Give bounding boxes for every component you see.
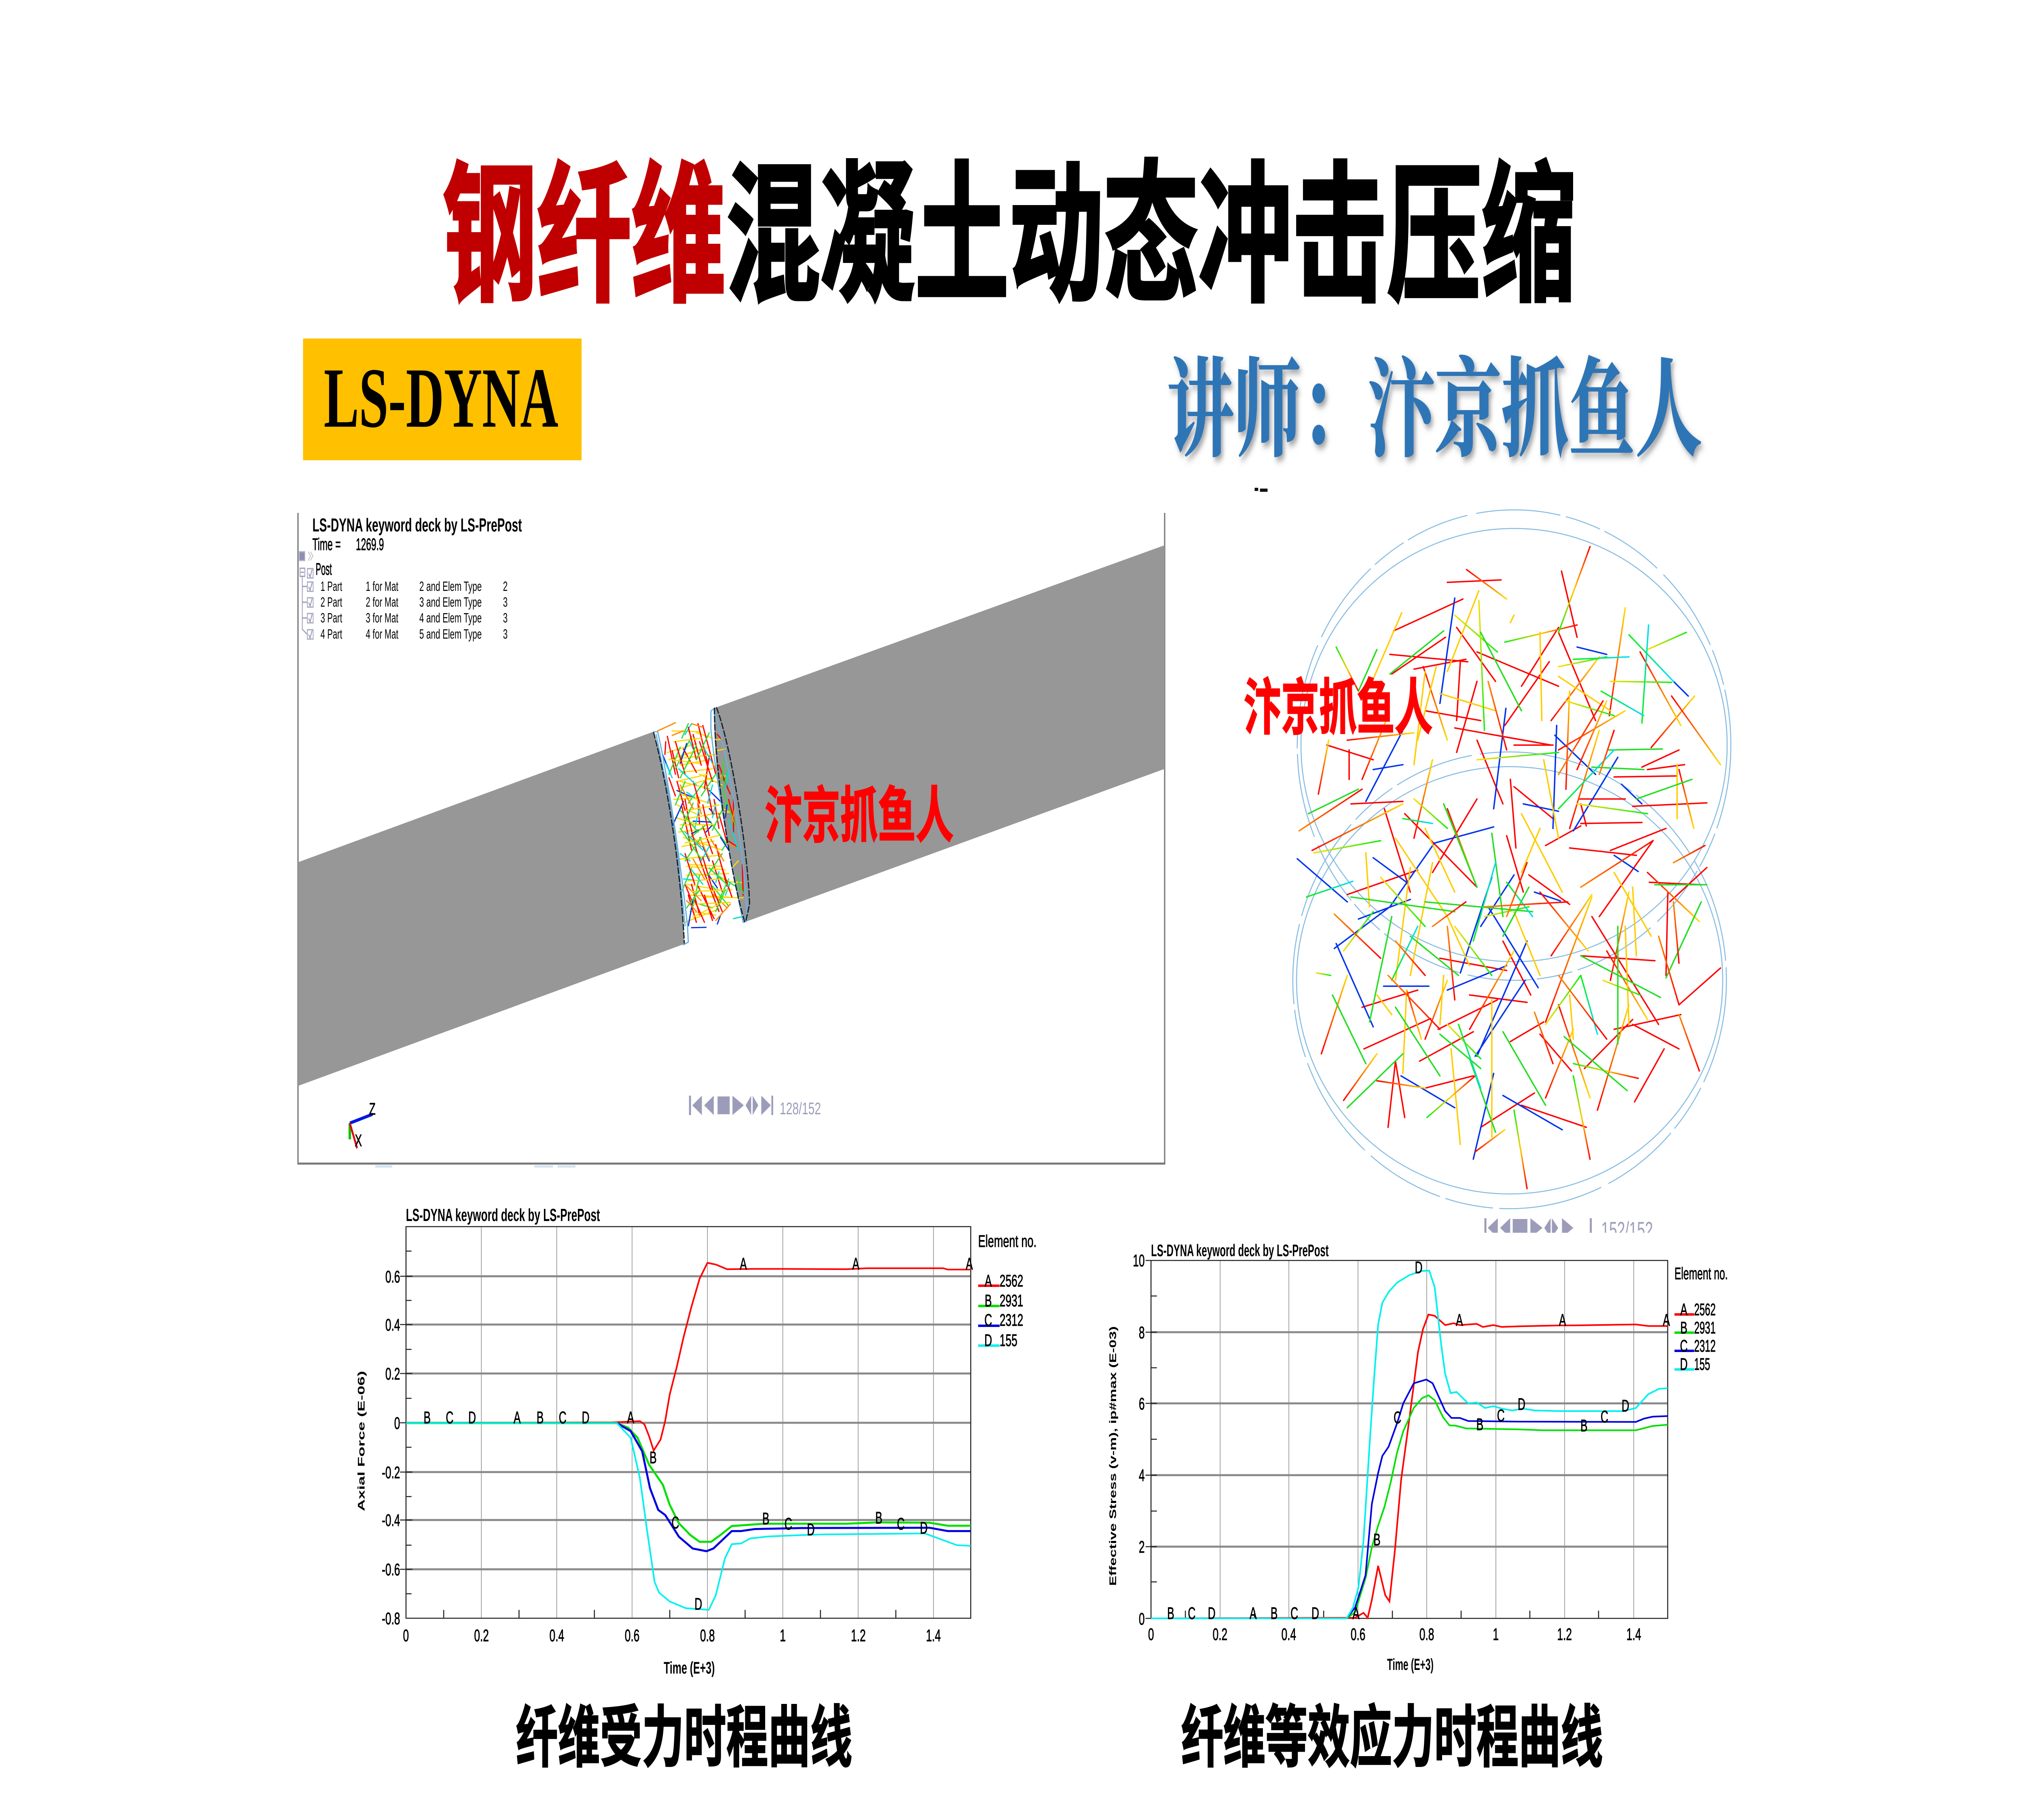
animation controls [689, 1096, 821, 1118]
plot header: 1269.9 [356, 535, 384, 554]
x tick labels: 0.2 [1213, 1625, 1227, 1644]
legend [978, 1232, 1036, 1350]
y axis title: Axial Force (E-06) [356, 1371, 366, 1511]
curve letters: C [1601, 1407, 1608, 1426]
x tick labels: 1.2 [851, 1626, 866, 1645]
y tick labels [1133, 1251, 1145, 1629]
curve letters: A [514, 1408, 521, 1427]
clipped animation controls [1484, 1218, 1652, 1233]
badge: LS-DYNA: LS-DYNA [324, 351, 558, 446]
chart title: LS-DYNA keyword deck by LS-PrePost [406, 1205, 600, 1225]
legend: D [984, 1331, 992, 1350]
caption: fiber force: 纤维受力时程曲线 [516, 1701, 852, 1776]
legend: 155 [1000, 1331, 1017, 1350]
curve letters: A [1663, 1311, 1670, 1330]
legend: 2312 [1000, 1311, 1023, 1330]
specimen rings [1293, 510, 1731, 1208]
curve letters: D [1311, 1604, 1319, 1623]
x tick labels: 0 [403, 1626, 409, 1645]
curve letters: A [1250, 1604, 1257, 1623]
x tick labels: 1.4 [926, 1626, 941, 1645]
part tree legend: 1 for Mat [366, 579, 398, 594]
caption: fiber equivalent stress: 纤维等效应力时程曲线 [1181, 1700, 1603, 1776]
x axis title: Time (E+3) [664, 1659, 715, 1678]
part tree legend: 3 for Mat [366, 610, 398, 625]
curve letters: D [468, 1408, 476, 1427]
curve letters: C [1497, 1406, 1505, 1425]
y tick labels [382, 1268, 400, 1628]
legend: 2312 [1694, 1337, 1716, 1356]
curve letters: D [807, 1520, 814, 1539]
curve letters: C [559, 1408, 567, 1427]
legend [1675, 1264, 1728, 1374]
y tick labels: 6 [1139, 1395, 1145, 1414]
legend: C [984, 1311, 992, 1330]
legend: A [1680, 1300, 1688, 1319]
y tick labels: -0.2 [382, 1463, 400, 1482]
y tick labels: 4 [1139, 1466, 1145, 1485]
curve letters: C [1394, 1408, 1401, 1427]
curve letters: D [1208, 1604, 1216, 1623]
y tick labels: 0.2 [385, 1365, 400, 1384]
curve letters: C [446, 1408, 453, 1427]
x tick labels: 1 [780, 1626, 786, 1645]
y tick labels: -0.4 [382, 1511, 400, 1530]
part tree legend: 3 [503, 626, 508, 641]
curve letters: C [1290, 1604, 1298, 1623]
curve letters: D [1518, 1395, 1525, 1414]
icon: axis triad: Z [369, 1100, 376, 1119]
chart: axial force [356, 1205, 1036, 1678]
curve letters: B [1476, 1415, 1483, 1434]
panel: pipe simulation [298, 513, 1165, 1168]
legend: 155 [1694, 1355, 1710, 1374]
part tree legend: 1 Part [320, 579, 343, 594]
part tree legend: 4 Part [320, 626, 343, 641]
y tick labels: 8 [1139, 1323, 1145, 1342]
part tree legend: 2 Part [320, 595, 343, 609]
curve letters: B [1373, 1530, 1381, 1549]
curve letters: A [740, 1255, 747, 1274]
curve letters [423, 1255, 973, 1614]
part tree legend: 2 [503, 579, 508, 594]
watermark: 汴京抓鱼人 [765, 782, 954, 850]
legend: Element no. [1675, 1264, 1728, 1283]
fibers [1297, 546, 1720, 1189]
x tick labels: 0.4 [550, 1626, 564, 1645]
curve letters: C [1188, 1604, 1195, 1623]
y tick labels: 0.6 [385, 1268, 400, 1287]
x tick labels: 0.6 [1351, 1625, 1365, 1644]
x tick labels: 0.6 [625, 1626, 639, 1645]
grid and curves [1146, 1260, 1668, 1619]
x tick labels: 1.2 [1557, 1625, 1572, 1644]
legend: 2562 [1694, 1300, 1716, 1319]
curve letters: D [582, 1408, 590, 1427]
x tick labels: 1 [1493, 1625, 1499, 1644]
legend: B [1680, 1318, 1688, 1337]
title: 钢纤维混凝土动态冲击压缩 [442, 152, 1576, 321]
icon: axis triad: X [355, 1131, 362, 1150]
animation controls: 128/152 [780, 1099, 821, 1118]
x tick labels: 1.4 [1626, 1625, 1641, 1644]
badge: LS-DYNA [303, 339, 582, 460]
y tick labels: -0.6 [382, 1560, 400, 1579]
curve letters: B [762, 1509, 770, 1528]
curve letters: A [852, 1255, 859, 1274]
x tick labels: 0.8 [700, 1626, 715, 1645]
chart title: LS-DYNA keyword deck by LS-PrePost [1151, 1241, 1329, 1260]
curve letters: A [627, 1408, 635, 1427]
x tick labels: 0.8 [1419, 1625, 1434, 1644]
part tree legend: 4 for Mat [366, 626, 398, 641]
curve letters: C [672, 1513, 679, 1532]
y tick labels: 2 [1139, 1538, 1145, 1557]
part tree legend: 2 and Elem Type [419, 579, 482, 594]
plot header: Time = [312, 535, 341, 554]
legend: 2562 [1000, 1272, 1023, 1291]
plot header [312, 515, 522, 554]
part tree legend [299, 552, 508, 641]
lecturer name: 讲师：汴京抓鱼人 [1167, 351, 1702, 470]
curve letters: B [537, 1408, 544, 1427]
curve letters: B [1167, 1604, 1174, 1623]
legend: A [985, 1272, 992, 1291]
part tree legend: 3 Part [320, 610, 343, 625]
x tick labels: 0.2 [474, 1626, 489, 1645]
curve letters: B [1271, 1604, 1277, 1623]
part tree legend: Post [316, 560, 332, 579]
curve letters: C [785, 1515, 792, 1534]
legend: D [1680, 1355, 1688, 1374]
legend: B [985, 1291, 992, 1310]
y tick labels: -0.8 [382, 1609, 400, 1628]
curve letters: A [966, 1255, 973, 1274]
part tree legend: 2 for Mat [366, 595, 398, 609]
x tick labels [1148, 1625, 1641, 1644]
right gray cylinder [714, 545, 1165, 922]
part tree legend: 4 and Elem Type [419, 610, 482, 625]
y tick labels: 0 [394, 1414, 400, 1433]
curve letters: B [1580, 1416, 1588, 1435]
clipped animation controls: 152/152 [1601, 1217, 1653, 1242]
left gray cylinder [298, 732, 684, 1086]
icon: axis triad [350, 1100, 376, 1150]
part tree legend: 3 [503, 595, 508, 609]
curve letters: B [649, 1448, 657, 1467]
legend: C [1680, 1337, 1688, 1356]
curve letters: B [423, 1408, 431, 1427]
chart: effective stress [1107, 1241, 1728, 1674]
legend: 2931 [1000, 1291, 1023, 1310]
panel: fiber disc view [1244, 510, 1731, 1242]
x tick labels: 0 [1148, 1625, 1154, 1644]
curve letters: D [1415, 1258, 1423, 1277]
curve letters: A [1559, 1311, 1566, 1330]
curve letters [1167, 1258, 1670, 1623]
y axis title: Effective Stress (v-m), ip#max (E-03) [1107, 1326, 1118, 1586]
curve letters: A [1352, 1604, 1360, 1623]
curve letters: A [1456, 1311, 1463, 1330]
x axis title: Time (E+3) [1387, 1656, 1434, 1674]
watermark: 汴京抓鱼人 [1244, 674, 1433, 742]
fibers in gap [654, 708, 750, 945]
curve letters: B [875, 1509, 882, 1528]
curve letters: D [920, 1519, 928, 1538]
plot header: LS-DYNA keyword deck by LS-PrePost [312, 515, 522, 536]
legend: Element no. [978, 1232, 1036, 1251]
legend: 2931 [1694, 1318, 1716, 1337]
stray marks above disc [1254, 489, 1267, 490]
grid and curves [400, 1227, 971, 1618]
part tree legend: 3 and Elem Type [419, 595, 482, 609]
curve letters: C [897, 1515, 905, 1534]
y tick labels: 10 [1133, 1251, 1145, 1270]
curve letters: D [1622, 1397, 1629, 1416]
curve letters: D [694, 1595, 702, 1614]
x tick labels: 0.4 [1282, 1625, 1296, 1644]
part tree legend: 5 and Elem Type [419, 626, 482, 641]
y tick labels: 0 [1139, 1610, 1145, 1629]
part tree legend: 3 [503, 610, 508, 625]
x tick labels [403, 1626, 941, 1645]
frame [298, 513, 1165, 1164]
y tick labels: 0.4 [385, 1316, 400, 1335]
